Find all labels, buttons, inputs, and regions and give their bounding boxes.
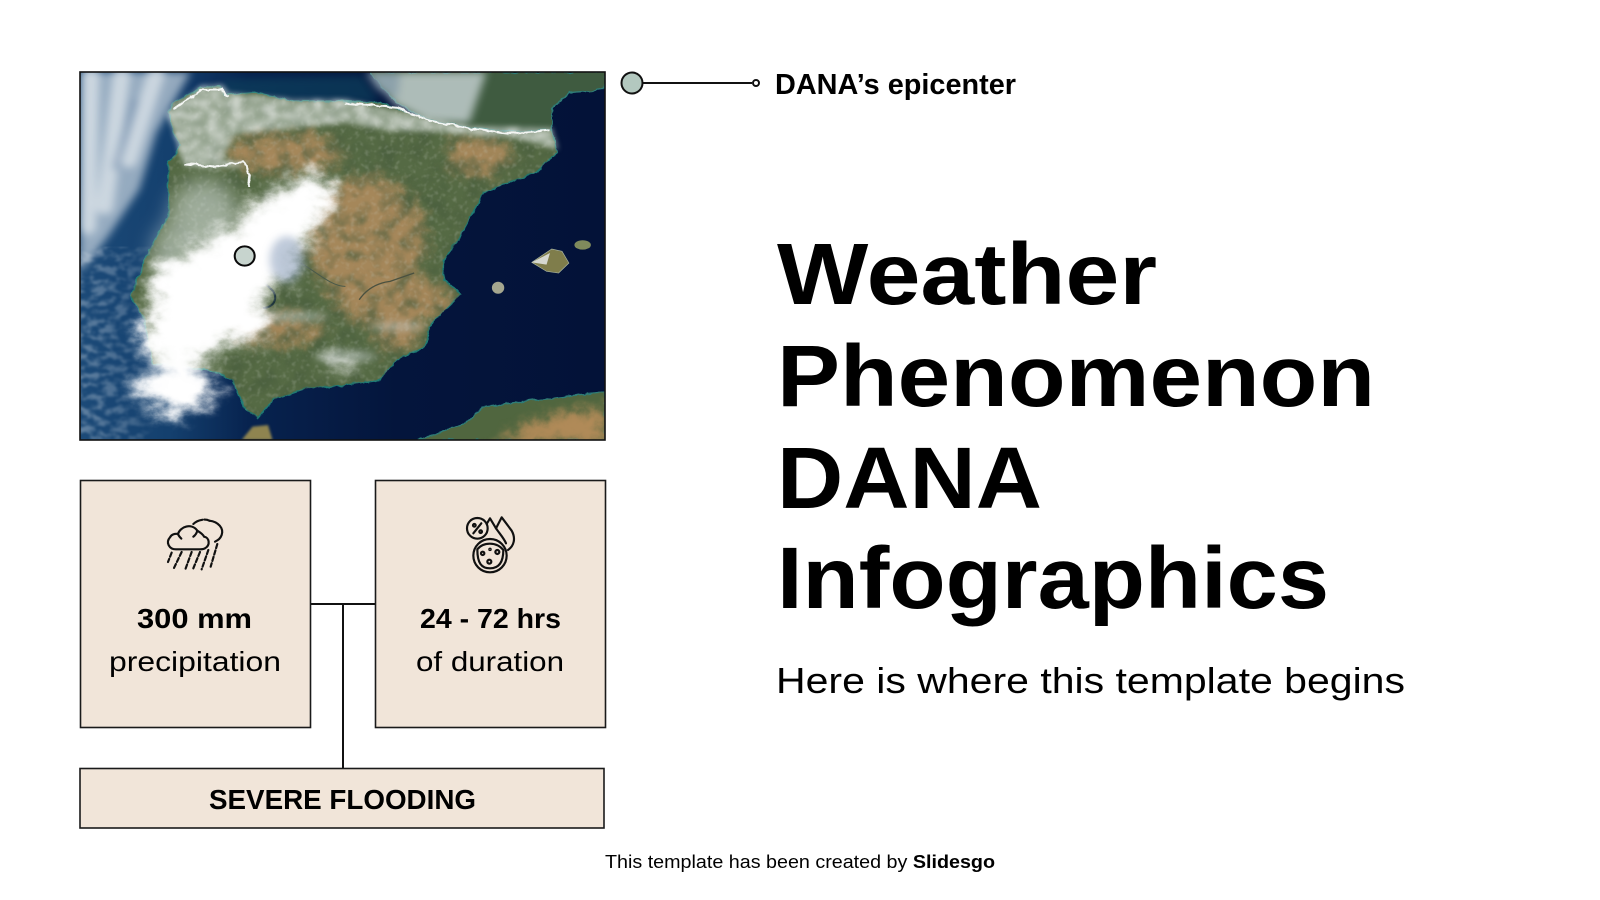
clouds: French haze — [366, 72, 486, 123]
stat: 300 mm: 300 mm — [137, 603, 252, 634]
subtitle: Here is where this template begins — [776, 660, 1405, 701]
callout: DANA's epicenter — [622, 69, 1016, 101]
label: severe flooding: SEVERE FLOODING — [209, 784, 476, 815]
clouds: sharp coastal edge — [174, 90, 550, 188]
label: precipitation: precipitation — [109, 646, 281, 677]
land: Iberian Peninsula — [131, 86, 557, 418]
land: arid plateau — [225, 133, 510, 350]
title: Infographics — [777, 530, 1329, 627]
clouds: Portugal haze — [153, 180, 239, 283]
clouds: northern coast white band — [163, 83, 562, 173]
title: Phenomenon — [777, 328, 1375, 425]
panel: precipitation — [80, 480, 310, 728]
clouds: main DANA mass — [136, 164, 349, 413]
clouds: bluish shadow on east flank — [270, 236, 304, 283]
land: Balearic Islands — [492, 240, 591, 294]
panel: satellite map of the Iberian Peninsula — [80, 72, 605, 443]
icon: rain cloud — [168, 520, 222, 569]
land: fine speckle — [122, 83, 569, 423]
title — [777, 226, 1375, 627]
panel: severe flooding — [80, 768, 604, 828]
land: France — [369, 72, 605, 131]
clouds: Atlantic cirrus band — [80, 72, 191, 273]
footer credit: This template has been created by Slidesgo — [605, 851, 995, 872]
marker: epicenter on map — [235, 246, 255, 266]
icon: percent and water drop — [467, 517, 514, 572]
title: DANA — [777, 430, 1042, 527]
connector between boxes — [310, 604, 375, 768]
land: Ceuta coast — [242, 425, 273, 440]
clouds: grey band over the south — [253, 312, 424, 363]
clouds: south-west scattered patches — [80, 246, 156, 440]
sea: teal shallow shelf — [222, 76, 380, 103]
land: North Africa — [418, 392, 605, 440]
stat: 24 - 72 hrs: 24 - 72 hrs — [420, 603, 561, 634]
land: interior textures — [122, 83, 569, 423]
panel: duration — [376, 480, 606, 728]
callout marker and leader line — [622, 72, 759, 94]
land: Tagus reservoirs — [263, 284, 276, 309]
callout label: DANA’s epicenter — [775, 69, 1016, 101]
label: of duration: of duration — [416, 646, 564, 677]
land: green mottling — [122, 83, 569, 423]
title: Weather — [777, 226, 1157, 323]
